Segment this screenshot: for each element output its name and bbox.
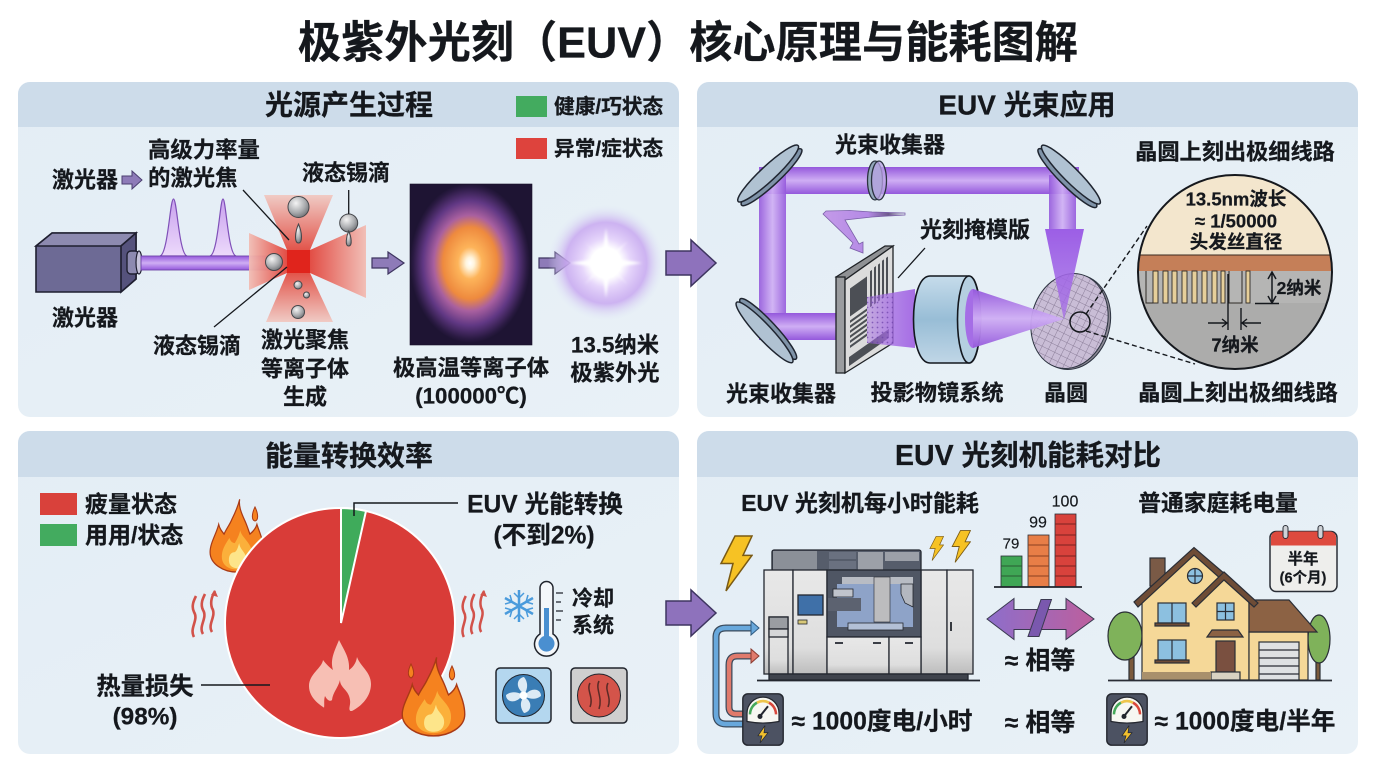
panel: 能量转换效率	[18, 431, 679, 754]
tree left	[1108, 612, 1142, 680]
double arrow	[987, 598, 1094, 640]
bar chart	[994, 494, 1082, 587]
label: 冷却系统: 冷却	[572, 588, 614, 610]
light through mask	[867, 289, 915, 348]
label: 液态锡滴 bottom: 液态锡滴	[153, 334, 241, 358]
pipes: cooling arrows	[716, 621, 759, 724]
icon: calendar	[1270, 526, 1337, 592]
label: 投影物镜系统: 投影物镜系统	[870, 380, 1004, 406]
icon: heater	[571, 668, 627, 723]
tree right	[1308, 615, 1330, 680]
icon: small bolt 2	[952, 531, 970, 562]
label: 光刻掩模版: 光刻掩模版	[920, 218, 1030, 242]
focus light into wafer	[1045, 229, 1084, 320]
dimension: 2纳米	[1255, 272, 1322, 304]
label: EUV 光能转换: EUV 光能转换	[467, 490, 623, 518]
leader line: mask	[898, 248, 925, 278]
arrow 2	[539, 252, 570, 274]
collector lens	[868, 161, 886, 200]
label: 极高温等离子体	[393, 354, 550, 408]
tin droplets	[266, 196, 358, 318]
label: 晶圆上刻出极细线路 top: 晶圆上刻出极细线路	[1135, 140, 1335, 164]
label: 13.5纳米极紫外光	[570, 332, 660, 386]
projection lens	[914, 276, 981, 363]
leader line: EUV	[354, 503, 458, 516]
icon: fan	[496, 668, 551, 723]
heading: EUV 光束应用: EUV 光束应用	[938, 90, 1116, 120]
label: 晶圆: 晶圆	[1044, 380, 1088, 406]
leader line: heat	[201, 684, 270, 686]
label: 光束收集器 top: 光束收集器	[835, 132, 945, 158]
wafer focus circle	[1070, 312, 1090, 332]
label: 冷却系统	[572, 588, 614, 638]
label: 高级力率量的激光焦: 的激光焦	[148, 166, 238, 190]
dimension: 7纳米: 7纳米	[1211, 334, 1259, 356]
icon: meter home	[1107, 694, 1147, 745]
label: 普通家庭耗电量: 普通家庭耗电量	[1138, 490, 1298, 516]
icon: meter EUV	[743, 694, 783, 745]
legend: 用用/状态	[85, 522, 183, 548]
label: EUV 光能转换	[467, 490, 623, 550]
label: 激光聚焦等离子体生成	[261, 328, 349, 410]
icon: snowflake	[505, 590, 533, 622]
pie slice: EUV 2%	[341, 508, 366, 623]
label: 液态锡滴 top: 液态锡滴	[302, 160, 390, 186]
label: EUV 光刻机每小时能耗: EUV 光刻机每小时能耗	[741, 490, 979, 516]
label: EUV 光能转换: (不到2%)	[493, 522, 595, 550]
label: 热量损失	[96, 674, 194, 730]
legend: 健康/巧状态	[554, 94, 663, 118]
mask plate	[836, 246, 893, 373]
label: 激光聚焦等离子体生成: 激光聚焦	[261, 328, 349, 352]
zoom circle	[1138, 174, 1332, 371]
panel: EUV 光刻机能耗对比	[697, 431, 1358, 754]
pie chart	[225, 508, 455, 738]
zoom text	[1186, 188, 1286, 252]
icon: calendar: 半年	[1287, 549, 1319, 568]
converging light cone	[973, 289, 1064, 348]
icon: laser device	[36, 233, 142, 292]
label: 极高温等离子体: (100000℃)	[415, 384, 527, 408]
label: 光束收集器 bottom: 光束收集器	[726, 382, 836, 406]
zoom text: ≈ 1/50000	[1195, 210, 1277, 232]
panel: 光源产生过程	[18, 82, 679, 417]
bar: red 100: 100	[1052, 494, 1078, 510]
label: 冷却系统: 系统	[572, 614, 614, 638]
dashed zoom lines	[1086, 226, 1195, 364]
icon: heat waves left	[193, 590, 218, 637]
EUV star burst	[548, 205, 664, 321]
legend	[516, 94, 663, 160]
label: 相等 lower: ≈ 相等	[1005, 709, 1075, 737]
label: 高级力率量的激光焦: 高级力率量	[148, 138, 260, 162]
leader lines	[214, 190, 349, 327]
heading: EUV 光刻机能耗对比: EUV 光刻机能耗对比	[895, 440, 1161, 472]
label: 相等 upper: ≈ 相等	[1005, 647, 1075, 675]
label: 激光聚焦等离子体生成: 生成	[283, 384, 327, 410]
icon: large bolt	[721, 536, 752, 591]
icon: calendar: (6个月)	[1280, 570, 1327, 586]
heading: 能量转换效率: 能量转换效率	[265, 440, 433, 472]
icon: thermometer	[535, 582, 563, 656]
icon: center flame	[309, 640, 371, 712]
title: 极紫外光刻（EUV）核心原理与能耗图解	[298, 18, 1078, 68]
arrow 1	[372, 252, 404, 274]
bar: green 79: 79	[1003, 536, 1019, 552]
bar: orange 99: 99	[1029, 514, 1047, 532]
legend	[40, 491, 183, 548]
label: 激光器 arrow: 激光器	[52, 168, 118, 192]
label: 13.5纳米极紫外光: 13.5纳米	[571, 332, 659, 358]
legend: 异常/症状态	[554, 136, 663, 160]
label: 晶圆上刻出极细线路 bottom: 晶圆上刻出极细线路	[1138, 380, 1338, 406]
bent arrow	[823, 210, 905, 253]
icon: small bolt 1	[930, 536, 944, 561]
arrow: bottom panels	[666, 590, 716, 636]
legend: 疲量状态	[85, 491, 177, 517]
heading: 光源产生过程: 光源产生过程	[265, 90, 433, 120]
icon: heat waves right	[462, 590, 487, 637]
plasma focus red hourglass	[249, 195, 366, 322]
wafer	[1021, 265, 1120, 378]
zoom text: 13.5nm波长	[1186, 188, 1286, 210]
mirrors	[731, 140, 1105, 367]
label: 热量损失: 热量损失	[96, 674, 194, 700]
arrow: top panels	[666, 240, 716, 286]
laser beam and pulses	[141, 199, 273, 270]
label: 激光器 bottom: 激光器	[52, 306, 118, 330]
dimension: 7纳米	[1208, 274, 1261, 356]
label: 激光聚焦等离子体生成: 等离子体	[261, 356, 349, 382]
label: 热量损失: (98%)	[113, 704, 177, 730]
icon: house	[1108, 548, 1332, 680]
beam path	[759, 167, 1079, 340]
dimension: 2纳米: 2纳米	[1277, 278, 1322, 298]
icon: small fire	[210, 499, 264, 572]
label: 1000度电/半年: ≈ 1000度电/半年	[1155, 708, 1335, 736]
icon: large fire	[402, 657, 465, 736]
plasma image	[410, 184, 532, 345]
label: 13.5纳米极紫外光: 极紫外光	[570, 360, 660, 386]
label: 极高温等离子体: 极高温等离子体	[393, 354, 550, 380]
label: 1000度电/小时: ≈ 1000度电/小时	[792, 708, 972, 736]
panel: EUV 光束应用	[697, 82, 1358, 417]
label: 高级力率量的激光焦	[148, 138, 260, 190]
zoom text: 头发丝直径	[1190, 232, 1282, 252]
EUV machine	[757, 550, 980, 680]
